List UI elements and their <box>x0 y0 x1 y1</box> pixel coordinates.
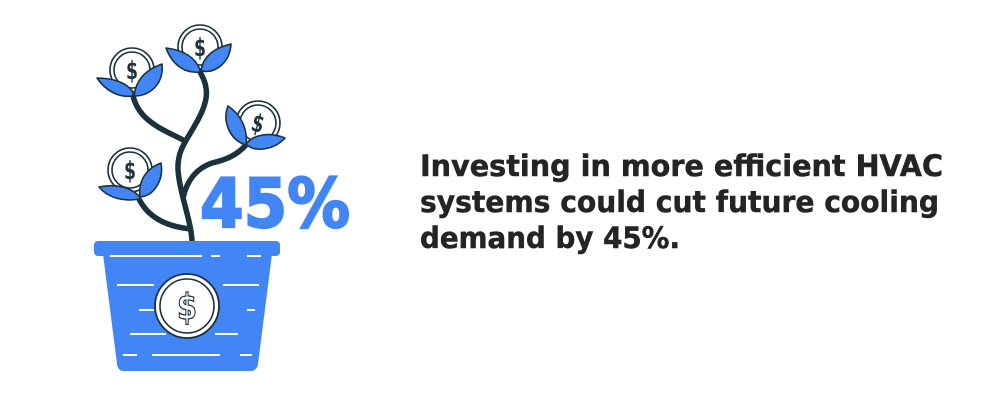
statement text: Investing in more efficient HVAC <box>420 149 943 183</box>
statement text: demand by 45%. <box>420 221 680 255</box>
pot coin: $ <box>177 287 197 328</box>
statement text: systems could cut future cooling <box>420 185 939 219</box>
coin plant: top left: $ <box>126 56 138 85</box>
pot rim <box>94 241 280 256</box>
coin plant: lower left <box>99 148 162 200</box>
coin plant: top left <box>97 48 162 96</box>
pot body <box>103 254 272 371</box>
big percentage: 45% <box>200 165 350 244</box>
coin plant: right: $ <box>248 108 267 139</box>
pot coin <box>155 274 219 338</box>
coin plant: right <box>226 101 285 149</box>
pot highlight lines <box>110 256 261 355</box>
flower pot <box>94 241 280 371</box>
statement text <box>420 149 943 255</box>
coin plant: top centre <box>166 25 231 72</box>
plant stems <box>133 72 246 241</box>
coin plant: top centre: $ <box>194 33 206 62</box>
coin plant: lower left: $ <box>124 156 136 185</box>
